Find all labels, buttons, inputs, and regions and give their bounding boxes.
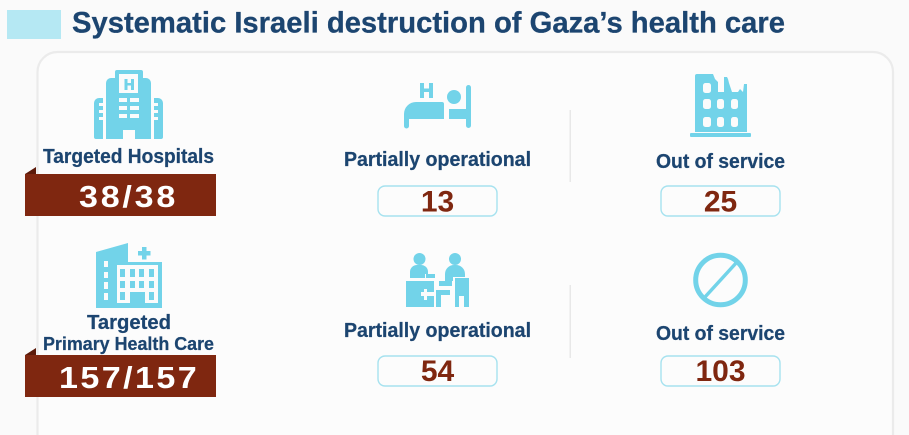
value box: 25 <box>661 186 780 218</box>
value box: 54 <box>378 355 497 388</box>
value box: 13: 13 <box>421 186 454 218</box>
value box: 25: 25 <box>704 186 737 218</box>
divider: hospitals row <box>570 110 571 182</box>
icon: damaged building <box>690 74 751 137</box>
label: out of service (hospitals): Out of service <box>656 151 785 173</box>
label: targeted primary health care <box>43 312 214 354</box>
value box: 13 <box>378 186 497 218</box>
value box: 103: 103 <box>695 355 746 388</box>
title: Systematic Israeli destruction of Gaza’s health care <box>72 6 785 40</box>
label: out of service (primary care): Out of service <box>656 323 785 345</box>
value box: 54: 54 <box>421 355 454 388</box>
label: targeted hospitals: Targeted Hospitals <box>43 146 214 168</box>
icon: doctor and patient at desk <box>406 253 469 307</box>
label: targeted primary health care: Primary Health Care <box>43 334 214 354</box>
value box: 103 <box>661 355 780 388</box>
ribbon: primary care total <box>25 348 216 397</box>
icon: hospital bed <box>404 83 471 128</box>
icon: prohibited sign <box>696 255 745 305</box>
icon: hospital building <box>94 70 163 139</box>
title accent block <box>7 10 61 39</box>
ribbon: primary care total: 157/157 <box>59 360 199 395</box>
label: partially operational (hospitals): Partially operational <box>344 149 531 171</box>
ribbon: hospitals total: 38/38 <box>79 179 178 214</box>
label: targeted primary health care: Targeted <box>87 312 171 334</box>
ribbon: hospitals total <box>25 167 216 216</box>
icon: primary health care building <box>96 243 162 308</box>
label: partially operational (primary care): Partially operational <box>344 320 531 342</box>
divider: primary care row <box>570 285 571 358</box>
